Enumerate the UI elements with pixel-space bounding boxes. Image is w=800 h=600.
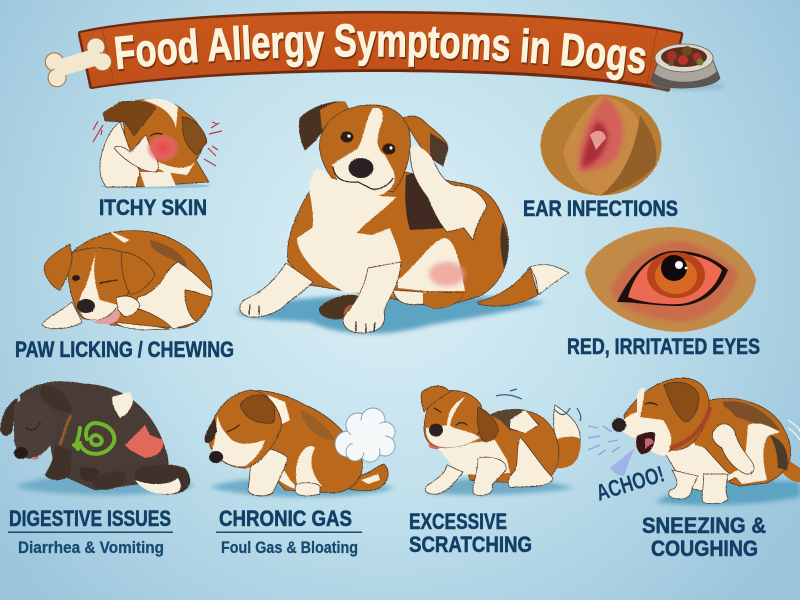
illustration: paw licking dog: [42, 231, 212, 330]
motion lines: [496, 389, 581, 421]
illustration: infected ear close-up: [540, 94, 662, 196]
label: digestive issues: Diarrhea & Vomiting: [18, 538, 164, 557]
sneeze spray: [588, 426, 635, 476]
illustration: itchy skin dog: [93, 99, 222, 188]
white chest: [297, 168, 401, 296]
rear paw: [319, 295, 360, 319]
illustration: chronic gas dog: [205, 390, 395, 497]
label: chronic gas: CHRONIC GAS: [219, 506, 352, 531]
tail: [478, 267, 538, 306]
label: excessive scratching: SCRATCHING: [409, 532, 532, 557]
scratching arm: [712, 424, 754, 474]
body: [680, 398, 791, 486]
label: excessive scratching: EXCESSIVE: [409, 509, 507, 534]
label: sneezing and coughing: [642, 513, 766, 561]
scratching hind leg: [410, 146, 487, 240]
label: sneezing and coughing: SNEEZING &: [642, 513, 766, 538]
front legs: [240, 263, 313, 317]
label: chronic gas: Foul Gas & Bloating: [221, 538, 358, 557]
icon: dog bone: [41, 35, 114, 89]
label: paw licking: PAW LICKING / CHEWING: [15, 337, 234, 362]
title banner: [44, 10, 724, 92]
illustration: digestive issues dog: [0, 382, 195, 495]
shoulder: [695, 405, 736, 448]
face: [340, 132, 354, 142]
collar: [670, 407, 710, 448]
head: [320, 105, 410, 192]
itch marks: [93, 121, 222, 166]
label: itchy skin: ITCHY SKIN: [99, 195, 207, 220]
label: excessive scratching: [409, 509, 532, 557]
body: [287, 172, 509, 308]
achoo callout: ACHOO!: [593, 460, 667, 506]
icon: green stomach swirl: [74, 423, 114, 454]
head: [624, 378, 709, 453]
label: digestive issues: [8, 506, 173, 557]
ground shadow: [236, 295, 546, 334]
icon: food bowl: [650, 44, 726, 90]
illustration: excessive scratching dog: [421, 386, 581, 496]
illustration: sneezing and coughing dog: [588, 378, 800, 505]
chest: [663, 440, 735, 492]
label: chronic gas: [216, 506, 362, 557]
icon: gas cloud: [335, 408, 395, 462]
title text: Food Allergy Symptoms in Dogs: [114, 24, 647, 82]
left ear: [299, 102, 349, 150]
white thigh: [728, 423, 780, 484]
tongue and toy paw: [93, 305, 120, 324]
label: ear infections: EAR INFECTIONS: [523, 196, 678, 221]
label: sneezing and coughing: COUGHING: [651, 536, 758, 561]
illustration: red eye close-up: [585, 227, 756, 332]
head: [68, 248, 135, 320]
illustration: central dog scratching its ear: [236, 102, 569, 334]
tail: [782, 458, 800, 482]
belly with rash: [398, 238, 465, 291]
rear leg: [393, 290, 463, 308]
label: red irritated eyes: RED, IRRITATED EYES: [567, 334, 760, 359]
right ear: [403, 116, 448, 166]
label: digestive issues: DIGESTIVE ISSUES: [9, 506, 171, 531]
